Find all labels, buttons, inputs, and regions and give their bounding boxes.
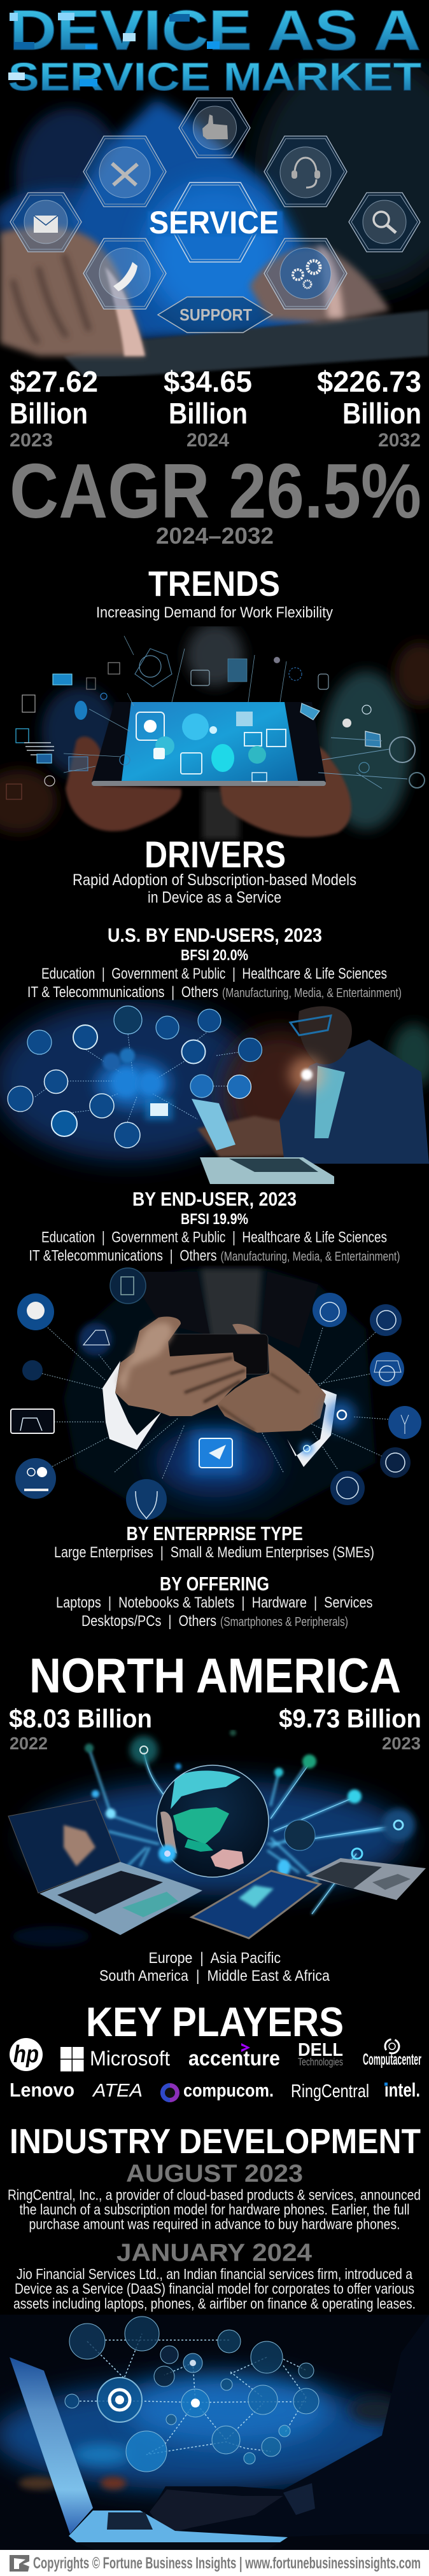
white shirt cuffs — [102, 1361, 337, 1467]
heading: key players: KEY PLAYERS — [86, 1999, 344, 2045]
logo: Dell Technologies: Technologies — [298, 2056, 343, 2068]
icon: phone hexagon — [83, 238, 166, 309]
left laptop — [8, 1800, 202, 1935]
icon: tools hexagon — [83, 136, 166, 207]
stat: 2024 market size: $34.65 — [164, 365, 252, 398]
stat: BFSI global share: BFSI 19.9% — [181, 1211, 248, 1228]
dotted connectors — [42, 1326, 388, 1478]
text: driver description — [73, 871, 356, 907]
left hand — [66, 736, 181, 831]
image: laptop with network diagram — [0, 2315, 429, 2550]
globe — [157, 1765, 269, 1877]
stat: 2032 market size — [317, 365, 421, 451]
hand and tablet — [197, 1115, 284, 1157]
text: other regions: Europe | Asia Pacific — [149, 1950, 281, 1967]
image: hands holding smartphone with icons — [11, 1268, 421, 1520]
logo: Compucom — [160, 2081, 274, 2102]
CAGR period: 2024–2032 — [156, 523, 274, 549]
left hand — [115, 1316, 246, 1416]
text: U.S. end-user segments: IT & Telecommunications | Others — [27, 984, 218, 1001]
icon: headset hexagon — [264, 136, 347, 207]
icon: like hexagon — [179, 98, 250, 158]
text: driver description: Rapid Adoption of Subscription-based Models — [73, 871, 356, 889]
stat: BFSI U.S. share: BFSI 20.0% — [181, 947, 248, 964]
tablet — [92, 702, 326, 786]
orbiting icons — [11, 1268, 421, 1520]
heading: August 2023: AUGUST 2023 — [126, 2160, 303, 2187]
icon: gears hexagon — [264, 238, 347, 309]
network lines — [89, 1749, 398, 1914]
icon: Fortune Business Insights logo — [10, 2555, 29, 2572]
heading: drivers: DRIVERS — [144, 834, 286, 876]
network nodes — [8, 1006, 262, 1148]
text: offering segments: Desktops/PCs | Others — [81, 1613, 216, 1630]
phone — [168, 1334, 268, 1374]
arm and hand — [146, 2315, 429, 2537]
support hexagon badge — [158, 297, 272, 333]
stat: 2024 market size — [164, 365, 252, 451]
stat: North America 2023: $9.73 Billion — [279, 1704, 421, 1733]
logo: Microsoft: Microsoft — [90, 2047, 170, 2070]
text: driver description: in Device as a Service — [148, 889, 281, 907]
logo: RingCentral: RingCentral — [291, 2081, 369, 2102]
right fingertip behind phone — [232, 1324, 261, 1334]
stat: North America 2022: $8.03 Billion — [9, 1704, 152, 1733]
text: offering segments: (Smartphones & Peripherals) — [220, 1615, 348, 1629]
logo: Computacenter — [363, 2039, 421, 2069]
stat: 2024 market size: 2024 — [186, 430, 229, 451]
right hand — [220, 745, 351, 837]
image: service hologram hero — [0, 51, 429, 379]
text: end-user segments: IT &Telecommunications | Others — [29, 1248, 216, 1264]
text: U.S. end-user segments — [27, 965, 402, 1001]
service label: SERVICE — [149, 205, 279, 240]
logo: Atea: ATEA — [92, 2081, 143, 2101]
heading: by end-user: BY END-USER, 2023 — [132, 1188, 297, 1210]
right laptop — [306, 1858, 426, 1900]
heading: trends: TRENDS — [148, 563, 280, 603]
title: SERVICE MARKET — [8, 55, 421, 99]
title — [8, 0, 421, 99]
stat: 2023 market size: Billion — [10, 397, 88, 430]
logo: HP: hp — [13, 2041, 39, 2068]
image: businessman with network tablet — [0, 1002, 429, 1184]
stat: 2023 market size — [10, 365, 98, 451]
stat: North America 2022: 2022 — [10, 1733, 48, 1753]
right hand — [216, 1344, 326, 1433]
laptop — [200, 1157, 334, 1184]
text: other regions — [99, 1950, 330, 1985]
center app icon — [190, 1429, 242, 1475]
tablet — [192, 1871, 320, 1938]
network diagram — [80, 2334, 306, 2455]
text: August 2023 development — [8, 2186, 421, 2232]
logo: Compucom: compucom. — [183, 2081, 274, 2101]
text: other regions: South America | Middle East & Africa — [99, 1967, 330, 1985]
center service hexagon — [148, 183, 283, 262]
text: January 2024 development — [13, 2266, 416, 2312]
image: tablet with holographic icons — [0, 623, 429, 839]
stat: North America 2023 — [279, 1704, 421, 1753]
text: trend description: Increasing Demand for Work Flexibility — [96, 604, 333, 621]
icon: mail hexagon — [10, 193, 81, 252]
stat: 2024 market size: Billion — [169, 397, 248, 430]
text: offering segments — [56, 1594, 373, 1630]
stat: 2023 market size: 2023 — [10, 430, 53, 451]
glowing nodes — [85, 1730, 415, 1876]
icon: search hexagon — [349, 193, 420, 252]
logo: Dell Technologies — [298, 2040, 343, 2068]
heading: by enterprise type: BY ENTERPRISE TYPE — [126, 1522, 303, 1545]
man in suit — [279, 1006, 429, 1164]
heading: January 2024: JANUARY 2024 — [116, 2240, 312, 2266]
footer — [0, 2550, 429, 2576]
stat: North America 2023: 2023 — [382, 1733, 421, 1753]
logo: Dell Technologies: DELL — [298, 2040, 343, 2060]
stat: North America 2022 — [9, 1704, 152, 1753]
floating holographic icons — [6, 636, 425, 799]
text: offering segments: Laptops | Notebooks & Tablets | Hardware | Services — [56, 1594, 373, 1611]
image: globe with connected devices — [8, 1730, 426, 1946]
heading: by offering: BY OFFERING — [160, 1573, 269, 1595]
logo: Microsoft — [60, 2047, 170, 2072]
stat: 2032 market size: 2032 — [378, 430, 421, 451]
logo: Accenture: accenture — [188, 2046, 280, 2070]
support label: SUPPORT — [179, 305, 252, 324]
stat: 2032 market size: $226.73 — [317, 365, 421, 398]
laptop — [10, 2357, 288, 2550]
logo: Lenovo: Lenovo — [10, 2079, 74, 2101]
heading: U.S. by end-users: U.S. BY END-USERS, 2023 — [108, 924, 322, 946]
stat: 2023 market size: $27.62 — [10, 365, 98, 398]
hand highlights and finger creases — [118, 1323, 172, 1393]
text: end-user segments — [29, 1229, 400, 1264]
